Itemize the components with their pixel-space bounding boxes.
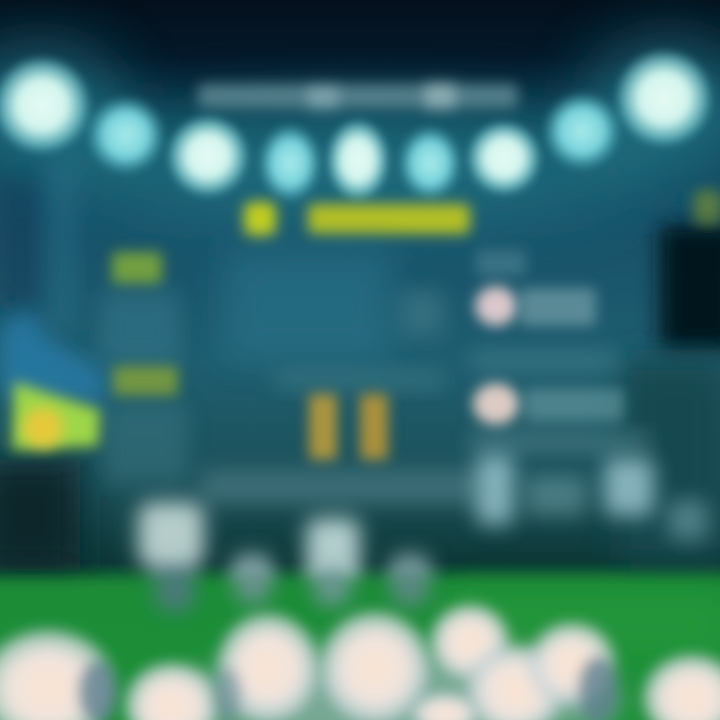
panel: left column (100, 252, 188, 484)
floodlights row (0, 48, 714, 203)
player 3 (306, 518, 360, 604)
icon: pink dot lower (473, 383, 519, 425)
ball shadow mass (180, 650, 620, 720)
icon: pale figure right 3 (668, 500, 708, 540)
text block: right under (470, 432, 650, 452)
icon: pale figure right 1 (476, 455, 514, 525)
floodlight centre 5 (466, 120, 542, 196)
text block: centre small (400, 290, 444, 336)
ball 7 (526, 620, 618, 720)
floodlight right cyan (542, 91, 622, 171)
ball 4 (317, 608, 433, 720)
ball 6 (463, 642, 567, 720)
title (198, 82, 518, 110)
floodlight centre 1 (166, 114, 250, 198)
text block: right top (476, 250, 526, 276)
lower player legs over pitch (158, 570, 426, 610)
text block: right bottom (526, 476, 586, 516)
text block: right upper (520, 288, 596, 326)
player 1 (138, 502, 204, 607)
text block: right mid (470, 350, 620, 372)
background haze and dark side areas (0, 35, 720, 570)
floodlight far right (614, 48, 714, 148)
text block: left upper (100, 292, 180, 362)
panel: left flag (0, 308, 105, 450)
left pylon (44, 160, 78, 330)
ball 9 (409, 692, 481, 720)
pitch (0, 580, 720, 720)
flag green (12, 382, 100, 450)
icon: pale figure right 2 (604, 458, 654, 516)
number one orange (309, 394, 337, 460)
panel: right column (470, 250, 708, 540)
text block: centre middle (275, 370, 445, 390)
floodlight far left (0, 55, 92, 155)
players row (138, 502, 430, 607)
icon: pink dot upper (475, 286, 517, 326)
ball 3 (214, 610, 322, 720)
footballs row (0, 602, 720, 720)
text block: centre upper (222, 250, 392, 360)
floodlight centre 3 (326, 118, 390, 202)
heading: left lower green (112, 366, 178, 396)
floodlight centre 4 (398, 125, 462, 201)
yellow subtitle (244, 202, 470, 236)
floodlight left cyan (86, 95, 166, 175)
text block: lower band (200, 470, 480, 504)
text block: left lower (104, 404, 188, 484)
floodlight centre 2 (258, 123, 322, 203)
player 4 (390, 554, 430, 604)
flag blue top (0, 308, 105, 405)
yellow mark top right (694, 190, 720, 224)
ball 2 (122, 660, 222, 720)
heading: left upper green (112, 252, 162, 284)
ball 8 (640, 652, 720, 720)
ball 5 (428, 602, 512, 682)
player 2 (232, 554, 272, 602)
panel: centre stats (200, 250, 480, 504)
flag yellow spot (23, 408, 63, 448)
ball 1 (0, 626, 120, 720)
number two orange (360, 394, 388, 460)
text block: right lower (524, 388, 624, 422)
